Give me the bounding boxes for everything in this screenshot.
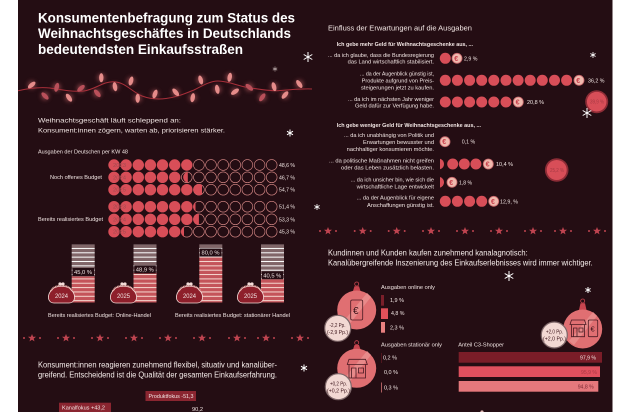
coin row: 20,8 %: 20,8 % xyxy=(527,100,544,106)
stacked purse bar: stationary 2024 xyxy=(176,244,222,303)
bar chart: C3 shopper share: 95,9 % xyxy=(581,370,597,376)
icon: coin xyxy=(574,75,584,85)
ornament: stationary only xyxy=(325,341,376,400)
stacked purse bar: stationary 2024: 80,0 % xyxy=(202,251,220,257)
legend: stationary only: Ausgaben stationär only xyxy=(381,343,442,349)
stacked purse bar: online 2024 xyxy=(48,244,95,303)
legend: online only xyxy=(381,285,435,333)
row labels: spend less: ... da ich unabhängig von Politik und xyxy=(344,133,434,139)
row labels: spend more: Geld dafür zur Verfügung habe. xyxy=(355,104,434,110)
badge: -2,2 Pp.: -2,2 Pp. xyxy=(330,323,346,329)
badge: -2,2 Pp.: (-2,9 Pp.) xyxy=(327,330,348,336)
bar chart: C3 shopper share xyxy=(458,343,602,392)
ornament: C3 shopper xyxy=(541,299,602,348)
row labels: spend more: ... da ich glaube, dass die Bundesregierung xyxy=(328,53,434,59)
legend: online only: 1,9 % xyxy=(390,298,404,304)
row labels: spend less xyxy=(329,133,435,209)
intro text left xyxy=(38,118,225,134)
coin row: 20,8 % xyxy=(440,96,544,108)
chart heading: Ausgaben der Deutschen per KW 48 xyxy=(38,150,128,156)
row 6 xyxy=(108,226,295,237)
row labels: spend more: das Land wirtschaftlich stabilisiert. xyxy=(348,60,434,66)
coin row: 12,9 % xyxy=(440,196,518,207)
row 2: 2024 xyxy=(113,175,126,181)
badge: +0,2 Pp.: (+0,2 Pp.) xyxy=(327,388,350,394)
star divider right xyxy=(319,227,606,234)
bar captions xyxy=(48,313,290,319)
row 2 xyxy=(108,172,295,183)
row 6: 2025 xyxy=(113,230,126,236)
row 4: 51,4 % xyxy=(279,205,295,211)
chart fragment: focus labels xyxy=(59,391,203,412)
bar chart: C3 shopper share: 97,9 % xyxy=(580,356,596,362)
bar captions: Bereits realisiertes Budget: stationärer Handel xyxy=(175,313,290,319)
heading: channel agnostic xyxy=(328,248,593,268)
bubble: 25,2 %: 25,2 % xyxy=(550,168,564,174)
bar captions: Bereits realisiertes Budget: Online-Handel xyxy=(48,313,151,319)
row labels: spend less: ... da ich unsicher bin, wie sich die xyxy=(351,177,434,183)
subheading: spend less: Ich gebe weniger Geld für Weihnachtsgeschenke aus, ... xyxy=(337,123,481,129)
garland of lights xyxy=(18,72,312,103)
coin row: 2,9 %: 2,9 % xyxy=(464,56,478,62)
legend: stationary only xyxy=(381,343,442,392)
row labels: spend less: ... da der Augenblick für eigene xyxy=(357,196,434,202)
row labels: Noch offenes Budget xyxy=(50,175,103,181)
text: flexible consumers: Konsument:innen reagieren zunehmend flexibel, situativ und kanalüber- xyxy=(38,360,277,370)
stacked purse bar: online 2025 xyxy=(110,244,156,303)
heading: channel agnostic: Kanalübergreifende Inszenierung des Einkaufserlebnisses wird immer wichtiger. xyxy=(328,258,593,268)
row labels: spend less: wirtschaftliche Lage entwickelt xyxy=(356,184,435,190)
icon: coin: € xyxy=(454,56,458,63)
row labels: spend less: oder das Leben zusätzlich belasten. xyxy=(341,166,434,172)
row 3: 2025 xyxy=(113,188,126,194)
icon: purse: 2025 xyxy=(117,294,131,300)
row 2: 46,7 % xyxy=(279,175,295,181)
heading: expectations: Einfluss der Erwartungen auf die Ausgaben xyxy=(328,24,472,32)
row labels: spend more: steigerungen jetzt zu kaufen. xyxy=(361,86,434,92)
row 4 xyxy=(108,201,295,212)
coin row: 0,1 %: 0,1 % xyxy=(462,140,475,146)
chart fragment: focus labels: Produktfokus -51,3 xyxy=(148,394,194,400)
row 5: 53,3 % xyxy=(279,217,295,223)
icon: smartphone: € xyxy=(353,306,359,317)
legend: stationary only: 0,2 % xyxy=(383,356,397,362)
subheading: spend more: Ich gebe mehr Geld für Weihnachtsgeschenke aus, ... xyxy=(337,42,473,48)
row 1 xyxy=(108,159,295,171)
dot chart: spending per week xyxy=(38,150,295,237)
row 1: 2023 xyxy=(113,163,126,169)
legend: online only: Ausgaben online only xyxy=(381,285,435,291)
icon: coin: € xyxy=(449,180,453,187)
icon: coin: € xyxy=(576,78,580,85)
heading: channel agnostic: Kundinnen und Kunden kaufen zunehmend kanalagnotisch: xyxy=(328,248,528,258)
row 3: 54,7 % xyxy=(279,188,295,194)
badge: +2,0 Pp.: (+2,0 Pp.) xyxy=(543,336,566,342)
icon: purse: 2024 xyxy=(55,294,69,300)
row labels: spend less: ... da politische Maßnahmen nicht greifen xyxy=(329,159,434,165)
row 5: 2024 xyxy=(113,217,126,223)
star divider left xyxy=(23,334,309,341)
badge: +0,2 Pp. xyxy=(325,374,351,400)
icon: shop xyxy=(347,359,367,378)
bubble: 39,9 %: 39,9 % xyxy=(590,100,604,106)
legend: stationary only: 0,0 % xyxy=(384,370,398,376)
row labels: spend less: Erwartungen bewusster und xyxy=(363,140,434,146)
title: Konsumentenbefragung zum Status des xyxy=(38,10,295,26)
bar chart: C3 shopper share: 94,8 % xyxy=(578,384,594,390)
ornament: online only xyxy=(325,282,376,341)
ornament hook fragment at bottom edge xyxy=(480,410,484,412)
coin row: 0,1 % xyxy=(440,137,475,147)
badge: +2,0 Pp. xyxy=(541,322,567,348)
icon: coin: € xyxy=(486,162,490,168)
coin row: 1,8 %: 1,8 % xyxy=(459,180,472,186)
legend: online only: 2,3 % xyxy=(390,325,404,331)
row labels: spend more: Produkte aufgrund von Preis- xyxy=(362,78,434,84)
stacked purse bar: online 2024: 45,0 % xyxy=(74,270,92,276)
bubble: 39,9 % xyxy=(585,90,608,113)
icon: coin: € xyxy=(442,139,446,146)
coin row: 36,2 % xyxy=(440,75,605,86)
bar chart: C3 shopper share: Anteil C3-Shopper xyxy=(458,343,504,349)
bubble: 25,2 % xyxy=(545,158,568,182)
stacked purse bar: online 2025: 48,9 % xyxy=(136,268,154,274)
row labels: spend more: ... da der Augenblick günstig ist, xyxy=(360,72,434,78)
icon: purse: 2024 xyxy=(183,294,197,300)
icon: purse: 2025 xyxy=(244,294,258,300)
stacked purse bar: stationary 2025: 40,5 % xyxy=(263,274,282,280)
icon: shop and phone: € xyxy=(590,324,596,334)
row labels: spend less: Anschaffungen günstig ist. xyxy=(367,203,434,209)
text: flexible consumers: greifend. Entscheidend ist die Qualität der gesamten Einkaufserfahrung. xyxy=(38,370,277,380)
badge: -2,2 Pp. xyxy=(325,315,351,341)
row 1: 48,6 % xyxy=(279,163,295,169)
row 3 xyxy=(108,184,295,195)
row labels xyxy=(38,175,104,223)
legend: online only: 4,8 % xyxy=(391,311,405,317)
chart fragment: focus labels: Kanalfokus +43,2 xyxy=(62,406,105,412)
coin row: 10,4 % xyxy=(440,158,513,170)
coin row: 1,8 % xyxy=(440,177,472,188)
text: flexible consumers xyxy=(38,360,277,380)
icon: coin: € xyxy=(516,100,520,106)
coin row: 2,9 % xyxy=(440,53,478,64)
legend: stationary only: 0,3 % xyxy=(384,386,398,392)
stacked purse bar: stationary 2025 xyxy=(237,244,284,303)
row labels: spend more xyxy=(328,53,434,110)
coin row: 10,4 %: 10,4 % xyxy=(496,162,513,168)
intro text left: Konsument:innen zögern, warten ab, priorisieren stärker. xyxy=(38,128,225,134)
badge: +2,0 Pp.: +2,0 Pp. xyxy=(546,330,563,336)
coin row: 36,2 %: 36,2 % xyxy=(588,78,605,84)
coin row: 12,9 %: 12,9, % xyxy=(500,199,518,205)
row labels: spend more: ... da ich im nächsten Jahr weniger xyxy=(348,97,434,103)
title: Weihnachtsgeschäftes in Deutschlands xyxy=(38,25,291,41)
title xyxy=(38,10,295,57)
intro text left: Weihnachtsgeschäft läuft schleppend an: xyxy=(38,118,181,124)
row 5 xyxy=(108,214,295,225)
row 6: 45,3 % xyxy=(279,230,295,236)
row labels: spend less: nachhaltiger konsumieren möchte. xyxy=(347,147,434,153)
title: bedeutendsten Einkaufsstraßen xyxy=(38,41,243,57)
row labels: Bereits realisiertes Budget xyxy=(38,217,104,223)
snowflakes xyxy=(273,52,596,372)
row 4: 2023 xyxy=(113,205,126,211)
icon: coin: € xyxy=(491,199,495,206)
badge: +0,2 Pp.: +0,2 Pp. xyxy=(330,382,347,388)
